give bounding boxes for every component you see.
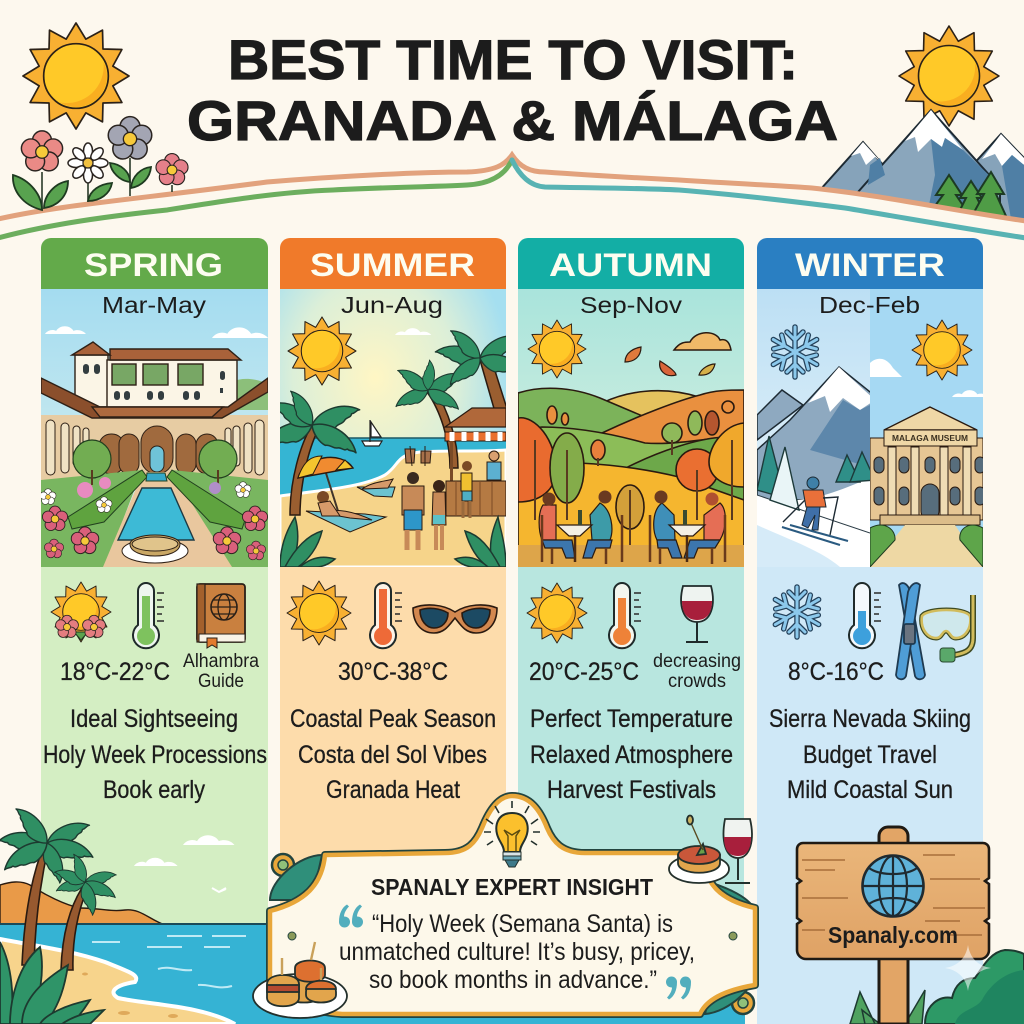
icon: winter thermometer: [849, 583, 881, 648]
beach sand dots: [82, 972, 178, 1018]
foreground leaves: [0, 942, 104, 1024]
winter header: [757, 238, 983, 289]
trees: [518, 401, 744, 529]
beach: [0, 939, 235, 1024]
spring header: SPRING: [84, 247, 223, 283]
spring illustration: Alhambra courtyard: [40, 289, 268, 567]
spring guide label: Alhambra: [183, 651, 259, 672]
spring month label: Mar-May: [102, 292, 207, 318]
icon: top right sun: [899, 26, 999, 126]
icon: sun with flowers: [51, 582, 111, 642]
summer header: SUMMER: [310, 247, 475, 283]
icon: autumn thermometer: [609, 583, 641, 648]
summer highlights: Coastal Peak Season: [290, 705, 496, 733]
icon: opening quote mark: [339, 904, 363, 928]
spring highlights: Book early: [103, 776, 205, 804]
icon: closing quote mark: [666, 976, 691, 1000]
autumn illustration: hills and dining: [518, 289, 744, 567]
diners: [539, 503, 725, 558]
autumn temperature: 20°C-25°C: [529, 658, 639, 686]
flower patches: [77, 477, 221, 498]
autumn highlights: Perfect Temperature: [530, 705, 733, 733]
icon: globe: [862, 856, 924, 916]
summer highlights: Costa del Sol Vibes: [298, 741, 487, 769]
frame: [270, 796, 755, 1014]
palms: [290, 425, 318, 515]
icon: mountains and pines: [820, 110, 1024, 225]
icon: top left sun: [23, 23, 129, 129]
winter illustration: Malaga museum: [870, 289, 988, 567]
post: [879, 827, 908, 1024]
icon: spring thermometer: [133, 583, 164, 648]
title: BEST TIME TO VISIT:: [228, 28, 798, 91]
museum sign text: MALAGA MUSEUM: [892, 433, 968, 443]
panel: winter column: [757, 238, 988, 1024]
autumn header: [518, 238, 744, 289]
icon: Alhambra guide book: [197, 584, 245, 648]
sparkle watermark: [945, 945, 991, 991]
callout quote text: [339, 910, 695, 994]
spring header: [41, 238, 268, 289]
wave divider: [0, 155, 1024, 238]
corner scrolls: [270, 854, 757, 1014]
panel: spring column: [40, 238, 268, 940]
autumn month label: Sep-Nov: [580, 292, 683, 318]
fountain: [122, 542, 188, 564]
orange hills: [0, 882, 165, 925]
autumn highlights: Relaxed Atmosphere: [530, 741, 733, 769]
winter highlights: Sierra Nevada Skiing: [769, 705, 971, 733]
rivets: [288, 932, 737, 940]
couple: [407, 472, 419, 484]
skier: [807, 477, 819, 489]
sign board: [797, 843, 989, 959]
winter highlights: Budget Travel: [803, 741, 937, 769]
summer illustration: beach: [280, 289, 506, 567]
title: [187, 28, 838, 152]
palm trees: [0, 803, 118, 970]
winter highlights: [769, 705, 971, 804]
winter header: WINTER: [795, 247, 945, 283]
summer highlights: [290, 705, 496, 804]
icon: autumn sun: [527, 583, 587, 643]
title: GRANADA & MÁLAGA: [187, 89, 838, 152]
winter temperature: 8°C-16°C: [788, 658, 884, 686]
icon: sunglasses: [413, 605, 497, 633]
callout quote text: so book months in advance.”: [369, 966, 657, 994]
panel: autumn column: [518, 238, 744, 940]
coastal scene: [0, 803, 745, 1024]
clouds in spring column: [134, 835, 234, 892]
panel: summer column: [280, 238, 506, 904]
winter month label: Dec-Feb: [819, 292, 920, 318]
sea highlights: [92, 936, 246, 987]
spring highlights: Holy Week Processions: [43, 741, 267, 769]
summer highlights: Granada Heat: [326, 776, 460, 804]
garden beds: [41, 470, 142, 567]
icon: light bulb: [484, 801, 540, 867]
umbrella: [325, 470, 338, 511]
spring guide label: Guide: [198, 671, 244, 692]
hills: [518, 388, 744, 545]
summer header: [280, 238, 506, 289]
icon: summer sun: [287, 581, 351, 645]
autumn crowds label: decreasing: [653, 651, 741, 672]
background cover under the wave: [0, 155, 1024, 240]
spring temperature: 18°C-22°C: [60, 658, 170, 686]
callout quote text: “Holy Week (Semana Santa) is: [372, 910, 673, 938]
callout heading: SPANALY EXPERT INSIGHT: [371, 874, 653, 900]
grass behind post: [850, 990, 925, 1024]
icon: skis: [896, 583, 925, 679]
autumn header: AUTUMN: [549, 247, 712, 283]
sailboat: [362, 420, 382, 446]
summer month label: Jun-Aug: [341, 292, 443, 318]
icon: snorkel mask: [922, 595, 973, 662]
trees: [73, 440, 237, 478]
autumn highlights: Harvest Festivals: [547, 776, 716, 804]
icon: summer thermometer: [370, 583, 402, 648]
wood grain: [802, 855, 985, 935]
foreground leaves: [280, 517, 506, 567]
icon: top left flowers: [13, 117, 188, 210]
icon: snowflake: [771, 587, 823, 637]
callout quote text: unmatched culture! It’s busy, pricey,: [339, 938, 695, 966]
towels with sunbathers: [306, 511, 386, 532]
signpost: [797, 827, 989, 1024]
autumn highlights: [530, 705, 733, 804]
beach bar: [445, 408, 506, 427]
summer temperature: 30°C-38°C: [338, 658, 448, 686]
bush: [925, 950, 1024, 1024]
sea: [0, 924, 745, 1024]
icon: wine glass: [681, 586, 713, 642]
distant walkers: [405, 446, 431, 466]
callout: Spanaly expert insight: [253, 796, 757, 1018]
spring highlights: Ideal Sightseeing: [70, 705, 238, 733]
website label: Spanaly.com: [828, 922, 958, 948]
arcades: [99, 426, 218, 474]
spring guide label: [183, 651, 259, 692]
spring highlights: [43, 705, 267, 804]
winter highlights: Mild Coastal Sun: [787, 776, 953, 804]
autumn crowds label: [653, 651, 741, 692]
autumn crowds label: crowds: [668, 671, 726, 692]
winter illustration: ski slope: [757, 289, 880, 567]
icon: tart and wine: [669, 816, 752, 883]
icon: tapas plate: [253, 942, 347, 1018]
building: [72, 342, 241, 408]
